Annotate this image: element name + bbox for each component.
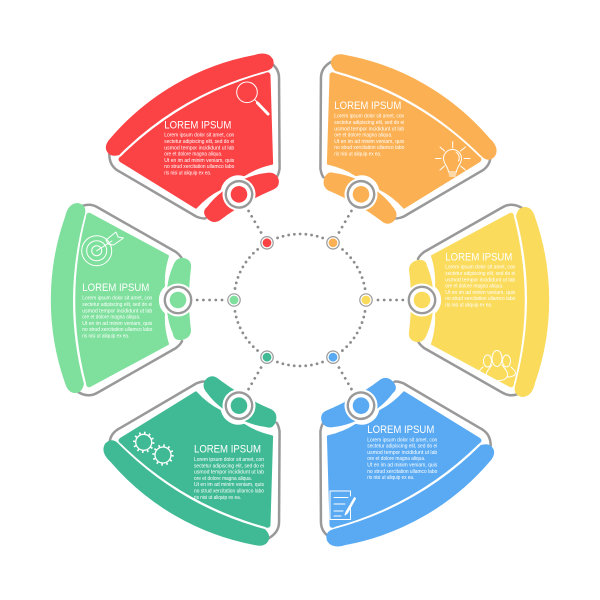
text block: yellow <box>445 265 516 308</box>
text block: orange: Lorem ipsum dolor sit amet, con <box>334 114 404 120</box>
text block: yellow: usmod tempor incididunt ut lab <box>445 277 515 283</box>
text block: red: Ut en im ad minim veniam, quis <box>164 158 235 164</box>
text block: yellow: Lorem ipsum dolor sit amet, con <box>445 265 515 271</box>
small node: orange <box>324 234 342 251</box>
panel: orange <box>270 37 509 257</box>
text block: light green: no strud xercitation ullamco labo <box>82 327 152 333</box>
panel: light green <box>51 203 194 395</box>
panel: yellow <box>406 205 549 397</box>
text block: orange <box>334 114 405 158</box>
heading: orange: LOREM IPSUM <box>334 100 401 112</box>
icon: magnifier <box>237 82 268 114</box>
small node: blue <box>324 349 342 366</box>
heading: light green: LOREM IPSUM <box>82 282 149 294</box>
text block: light green <box>82 296 153 340</box>
text block: teal: no strud xercitation ullamco labo <box>194 488 264 494</box>
text block: orange: sectetur adipiscing elit, sed do ei <box>334 120 404 126</box>
text block: light green: ris nisi ut aliquip ex ea. <box>82 334 129 340</box>
icon: people <box>479 350 515 381</box>
text block: orange: Ut en im ad minim veniam, quis <box>334 139 405 145</box>
text block: teal: ore et dolore magna aliqua. <box>194 476 252 482</box>
text block: blue: ore et dolore magna aliqua. <box>367 456 425 462</box>
text block: yellow: ore et dolore magna aliqua. <box>445 284 503 290</box>
text block: red: ris nisi ut aliquip ex ea. <box>164 170 211 176</box>
text block: orange: no strud xercitation ullamco labo <box>334 145 404 151</box>
icon: light bulb <box>436 142 470 176</box>
text block: light green: usmod tempor incididunt ut lab <box>82 308 152 314</box>
text block: light green: ore et dolore magna aliqua. <box>82 315 140 321</box>
text block: teal <box>194 457 264 501</box>
text block: orange: ore et dolore magna aliqua. <box>334 133 392 139</box>
small node: teal <box>258 349 276 366</box>
text block: blue: ris nisi ut aliquip ex ea. <box>367 475 414 481</box>
dotted connector ring <box>196 210 404 390</box>
heading: red: LOREM IPSUM <box>164 119 231 131</box>
text block: blue: usmod tempor incididunt ut lab <box>367 450 437 456</box>
small node: red <box>258 234 276 251</box>
text block: red: no strud xercitation ullamco labo <box>164 164 234 170</box>
text block: blue <box>367 437 438 481</box>
panel: red <box>93 36 331 256</box>
heading: teal: LOREM IPSUM <box>194 444 261 456</box>
panel: teal <box>91 343 330 563</box>
text block: red: usmod tempor incididunt ut lab <box>164 145 234 151</box>
small node: light green <box>226 292 242 308</box>
text block: blue: sectetur adipiscing elit, sed do ei <box>367 444 437 450</box>
text block: yellow: ris nisi ut aliquip ex ea. <box>445 302 492 308</box>
text block: orange: usmod tempor incididunt ut lab <box>334 126 404 132</box>
text block: blue: Lorem ipsum dolor sit amet, con <box>367 437 437 443</box>
heading: blue: LOREM IPSUM <box>367 424 434 436</box>
heading: yellow: LOREM IPSUM <box>445 251 512 263</box>
panel: blue <box>269 344 507 564</box>
text block: teal: ris nisi ut aliquip ex ea. <box>194 495 241 501</box>
text block: blue: no strud xercitation ullamco labo <box>367 469 437 475</box>
text block: teal: sectetur adipiscing elit, sed do ei <box>194 463 264 469</box>
icon: gears <box>134 433 173 465</box>
text block: light green: Ut en im ad minim veniam, quis <box>82 321 153 327</box>
text block: yellow: sectetur adipiscing elit, sed do ei <box>445 271 515 277</box>
text block: teal: Lorem ipsum dolor sit amet, con <box>194 457 264 463</box>
text block: yellow: Ut en im ad minim veniam, quis <box>445 290 516 296</box>
icon: document and pen <box>330 491 356 520</box>
text block: blue: Ut en im ad minim veniam, quis <box>367 462 438 468</box>
text block: red: ore et dolore magna aliqua. <box>164 152 222 158</box>
small node: yellow <box>358 292 374 308</box>
text block: orange: ris nisi ut aliquip ex ea. <box>334 152 381 158</box>
text block: red: Lorem ipsum dolor sit amet, con <box>164 133 234 139</box>
text block: teal: Ut en im ad minim veniam, quis <box>194 482 264 488</box>
icon: target with arrow <box>82 232 124 266</box>
text block: light green: sectetur adipiscing elit, sed do ei <box>82 302 152 308</box>
text block: yellow: no strud xercitation ullamco labo <box>445 296 515 302</box>
text block: light green: Lorem ipsum dolor sit amet, con <box>82 296 152 302</box>
text block: red <box>164 133 235 176</box>
text block: red: sectetur adipiscing elit, sed do ei <box>164 139 234 145</box>
text block: teal: usmod tempor incididunt ut lab <box>194 470 264 476</box>
